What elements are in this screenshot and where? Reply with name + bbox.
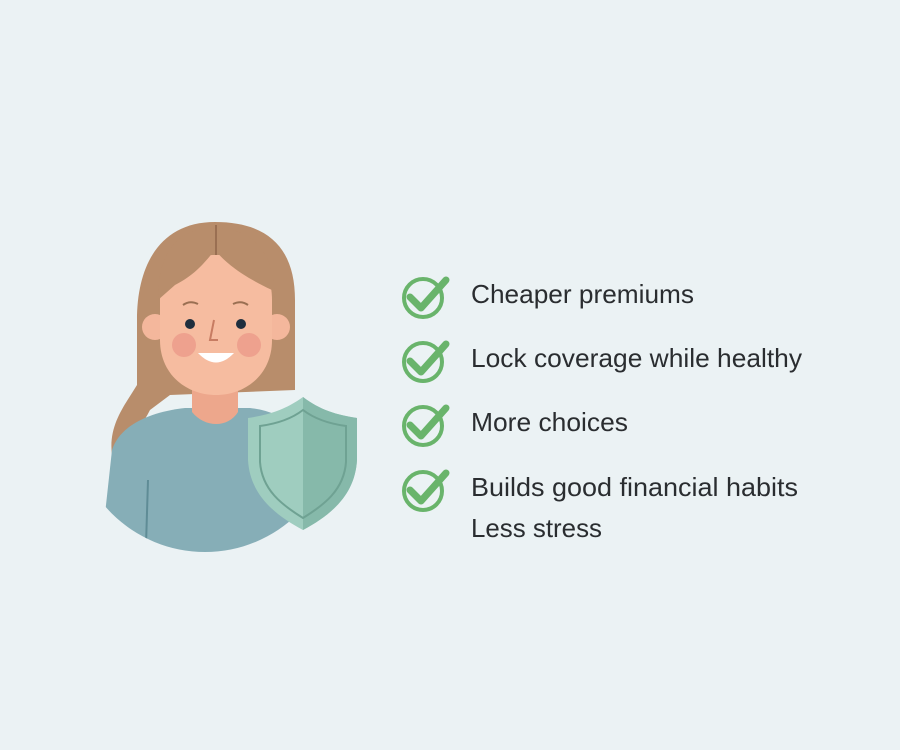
benefits list bbox=[404, 279, 802, 543]
item: lock coverage: Lock coverage while healthy bbox=[471, 343, 802, 373]
shirt body bbox=[106, 408, 289, 552]
item: financial habits: Builds good financial habits bbox=[471, 472, 798, 502]
hair back and ponytail bbox=[111, 222, 295, 455]
item: financial habits bbox=[404, 472, 798, 543]
icon: shield bbox=[248, 397, 357, 530]
item: cheaper premiums bbox=[404, 279, 694, 317]
illustration: woman with shield bbox=[100, 222, 357, 560]
item: lock coverage bbox=[404, 343, 802, 381]
face bbox=[142, 225, 290, 395]
item: more choices: More choices bbox=[471, 407, 628, 437]
item: financial habits: Less stress bbox=[471, 513, 602, 543]
item: more choices bbox=[404, 407, 628, 445]
item: cheaper premiums: Cheaper premiums bbox=[471, 279, 694, 309]
neck bbox=[192, 375, 238, 424]
